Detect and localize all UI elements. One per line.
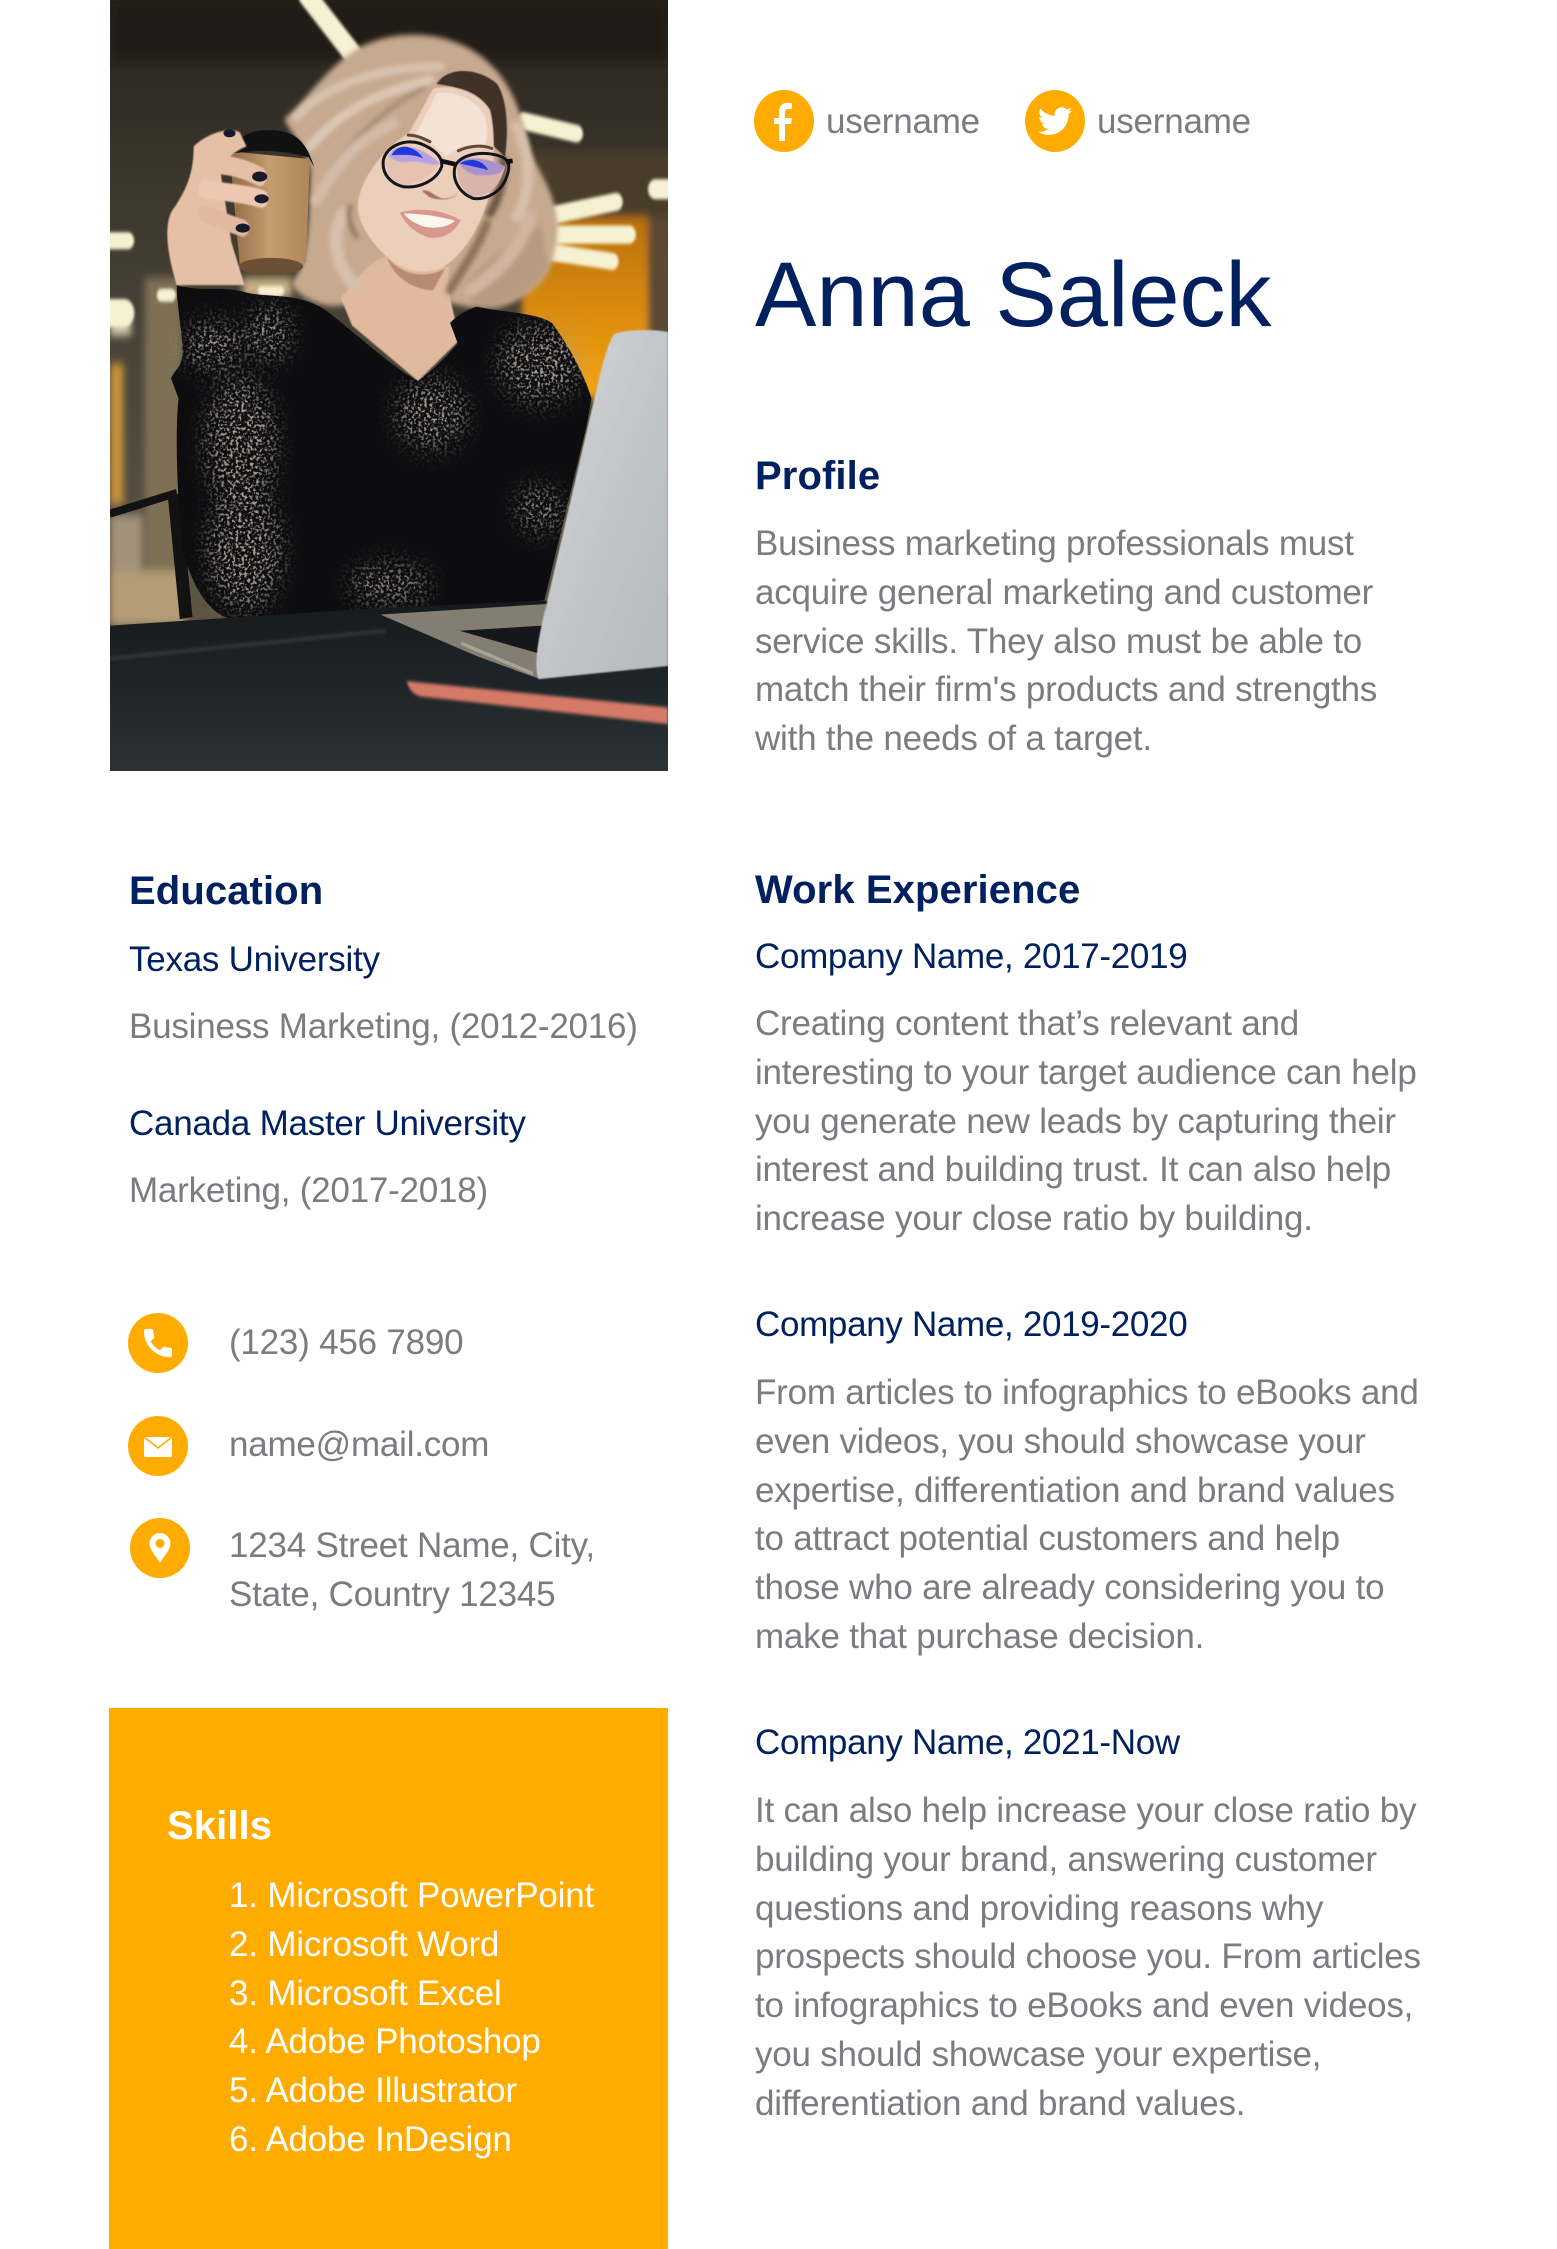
skills list: 5. Adobe Illustrator (229, 2071, 517, 2110)
phone number: (123) 456 7890 (229, 1323, 463, 1362)
job description 3: questions and providing reasons why (755, 1889, 1323, 1928)
chin shadow (387, 257, 445, 290)
job description 3 (755, 1791, 1421, 2123)
title: name: Anna Saleck (755, 244, 1272, 346)
skills list: 3. Microsoft Excel (229, 1974, 502, 2013)
hair backdrop (284, 35, 557, 309)
job title: 2021-Now: Company Name, 2021-Now (755, 1723, 1180, 1762)
photo: woman with coffee and laptop (110, 0, 668, 771)
degree: Marketing: Marketing, (2017-2018) (129, 1171, 488, 1210)
smile (400, 210, 461, 238)
panel: skills (109, 1708, 668, 2249)
job description 3: differentiation and brand values. (755, 2084, 1245, 2123)
job title: 2019-2020: Company Name, 2019-2020 (755, 1305, 1187, 1344)
fingernails (223, 129, 269, 233)
job title: 2017-2019: Company Name, 2017-2019 (755, 937, 1187, 976)
job description 2: expertise, differentiation and brand values (755, 1471, 1395, 1510)
degree: Business Marketing: Business Marketing, (2012-2016) (129, 1007, 638, 1046)
icon: phone (128, 1313, 188, 1373)
hand (167, 130, 262, 285)
hair strands (297, 67, 530, 290)
sweater (171, 285, 591, 620)
job description 1: increase your close ratio by building. (755, 1199, 1313, 1238)
skills list: 6. Adobe InDesign (229, 2120, 512, 2159)
neck (341, 257, 461, 381)
skills list: 1. Microsoft PowerPoint (229, 1876, 594, 1915)
job description 2: even videos, you should showcase your (755, 1422, 1366, 1461)
twitter icon (1025, 90, 1085, 152)
glasses (383, 142, 513, 199)
postal address (229, 1526, 595, 1614)
pink pencil (407, 681, 668, 724)
facebook icon (754, 90, 814, 152)
skills list (229, 1876, 594, 2159)
profile text: match their firm's products and strengths (755, 670, 1377, 709)
job description 3: It can also help increase your close ratio by (755, 1791, 1416, 1830)
icon: mail (128, 1416, 188, 1476)
heading: skills: Skills (167, 1804, 272, 1848)
job description 2 (755, 1373, 1419, 1656)
profile text: with the needs of a target. (755, 719, 1152, 758)
nose (422, 190, 458, 199)
profile text: service skills. They also must be able to (755, 622, 1362, 661)
school: Canada Master University: Canada Master University (129, 1104, 526, 1143)
postal address: 1234 Street Name, City, (229, 1526, 595, 1565)
job description 2: those who are already considering you to (755, 1568, 1384, 1607)
school: Texas University: Texas University (129, 940, 380, 979)
heading: profile: Profile (755, 454, 880, 498)
job description 3: to infographics to eBooks and even videos, (755, 1986, 1413, 2025)
email address: name@mail.com (229, 1425, 489, 1464)
job description 1: you generate new leads by capturing their (755, 1102, 1396, 1141)
skills list: 2. Microsoft Word (229, 1925, 499, 1964)
heading: work experience: Work Experience (755, 868, 1080, 912)
job description 2: From articles to infographics to eBooks and (755, 1373, 1419, 1412)
job description 1: interest and building trust. It can also help (755, 1150, 1391, 1189)
job description 3: building your brand, answering customer (755, 1840, 1377, 1879)
job description 2: make that purchase decision. (755, 1617, 1204, 1656)
skin (358, 87, 494, 272)
chair (110, 493, 186, 618)
twitter username: username (1097, 102, 1251, 141)
coffee cup (230, 130, 314, 275)
profile text (755, 524, 1377, 758)
job description 1: interesting to your target audience can help (755, 1053, 1417, 1092)
job description 1: Creating content that’s relevant and (755, 1004, 1299, 1043)
laptop (380, 330, 668, 679)
face and hair detail (297, 67, 530, 290)
table (110, 595, 668, 771)
photo background (110, 0, 673, 771)
icon: location pin (130, 1518, 190, 1578)
heading: education: Education (129, 869, 323, 913)
ceiling lights (110, 0, 669, 313)
job description 2: to attract potential customers and help (755, 1519, 1340, 1558)
eyebrows (408, 135, 492, 151)
job description 3: you should showcase your expertise, (755, 2035, 1321, 2074)
facebook username: username (826, 102, 980, 141)
postal address: State, Country 12345 (229, 1575, 555, 1614)
skills list: 4. Adobe Photoshop (229, 2022, 541, 2061)
profile text: acquire general marketing and customer (755, 573, 1373, 612)
profile text: Business marketing professionals must (755, 524, 1354, 563)
job description 3: prospects should choose you. From articles (755, 1937, 1421, 1976)
job description 1 (755, 1004, 1417, 1238)
